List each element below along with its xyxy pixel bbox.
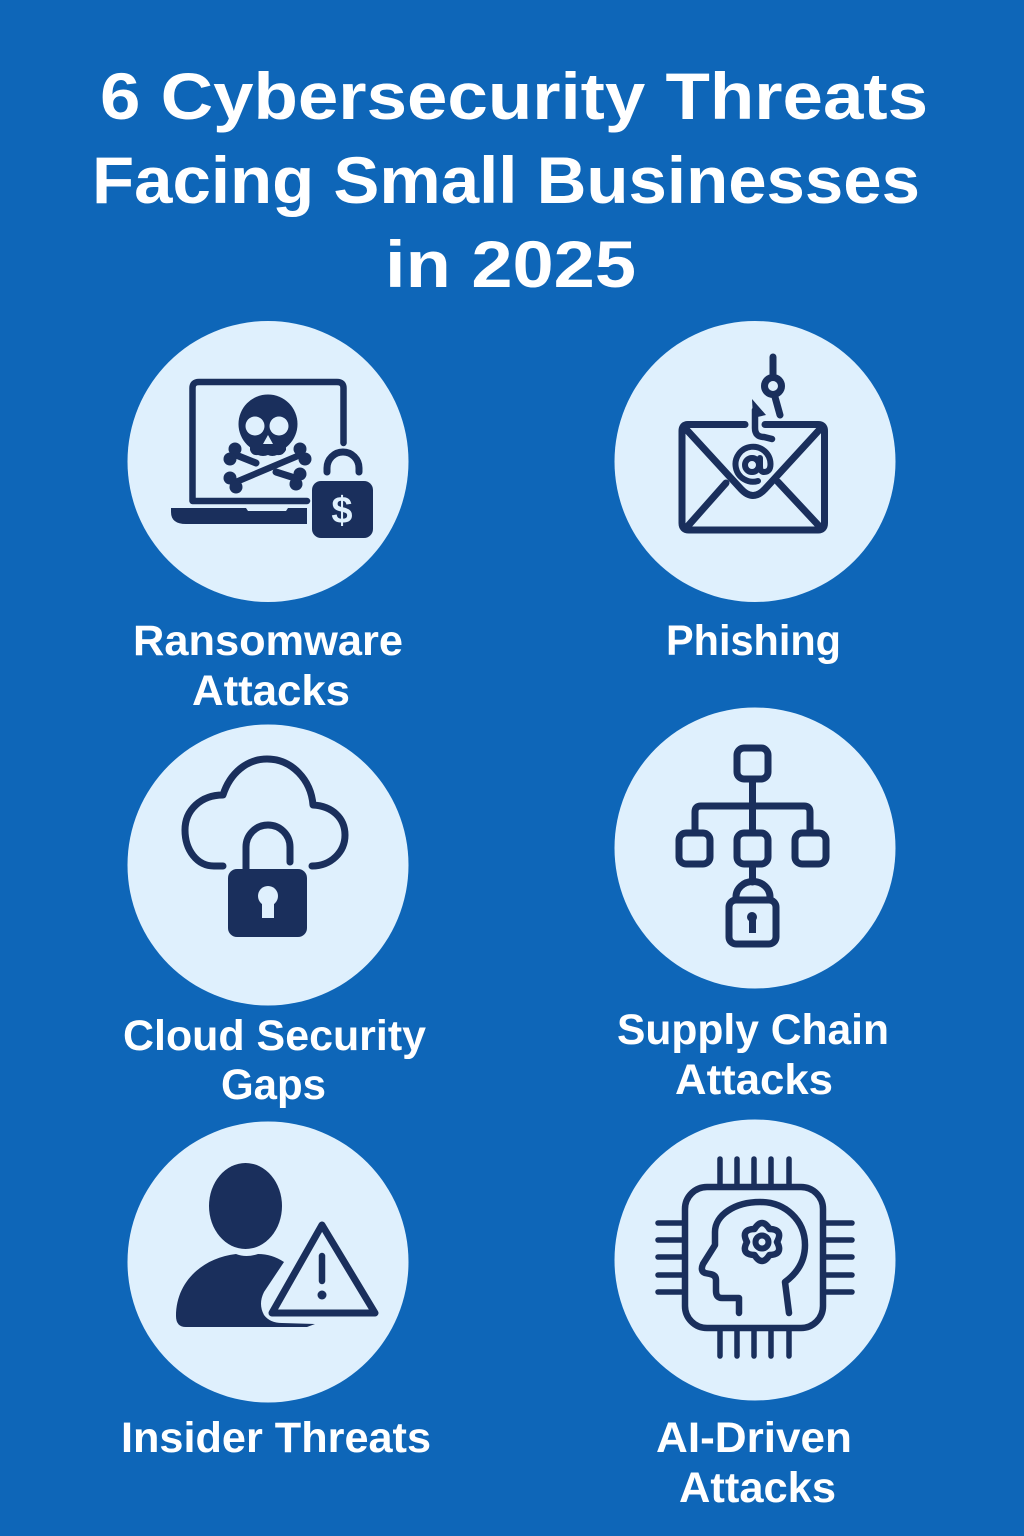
label: cloud security gaps: Gaps	[221, 1061, 326, 1109]
label: ai-driven attacks	[656, 1414, 852, 1512]
icon: laptop with skull and dollar padlock: $	[331, 490, 353, 532]
icon: laptop with skull and dollar padlock	[128, 321, 408, 602]
label: cloud security gaps: Cloud Security	[123, 1012, 426, 1060]
icon: envelope with fishing hook	[614, 321, 896, 602]
title	[92, 59, 928, 301]
panel: ransomware attacks	[128, 321, 408, 715]
panel: cloud security gaps	[123, 724, 426, 1109]
label: ai-driven attacks: AI-Driven	[656, 1414, 852, 1462]
label: cloud security gaps	[123, 1012, 426, 1109]
icon: chip with brain head and gear	[614, 1120, 896, 1400]
title: Facing Small Businesses	[92, 143, 920, 217]
panel: ai-driven attacks	[614, 1120, 896, 1512]
icon: cloud with padlock	[128, 724, 408, 1006]
icon: person with warning triangle	[128, 1122, 408, 1402]
label: ai-driven attacks: Attacks	[679, 1464, 836, 1512]
panel: supply chain attacks	[614, 708, 896, 1104]
label: phishing: Phishing	[666, 617, 841, 665]
panel: phishing	[614, 321, 896, 665]
label: supply chain attacks: Supply Chain	[617, 1006, 889, 1054]
label: ransomware attacks: Ransomware	[133, 617, 403, 665]
icon: network hierarchy with padlock	[614, 708, 896, 988]
label: insider threats: Insider Threats	[121, 1414, 431, 1462]
label: supply chain attacks: Attacks	[675, 1056, 833, 1104]
panel: insider threats	[121, 1122, 431, 1462]
label: ransomware attacks	[133, 617, 403, 715]
title: 6 Cybersecurity Threats	[100, 59, 928, 133]
title: in 2025	[385, 227, 636, 301]
label: supply chain attacks	[617, 1006, 889, 1104]
label: ransomware attacks: Attacks	[192, 667, 350, 715]
